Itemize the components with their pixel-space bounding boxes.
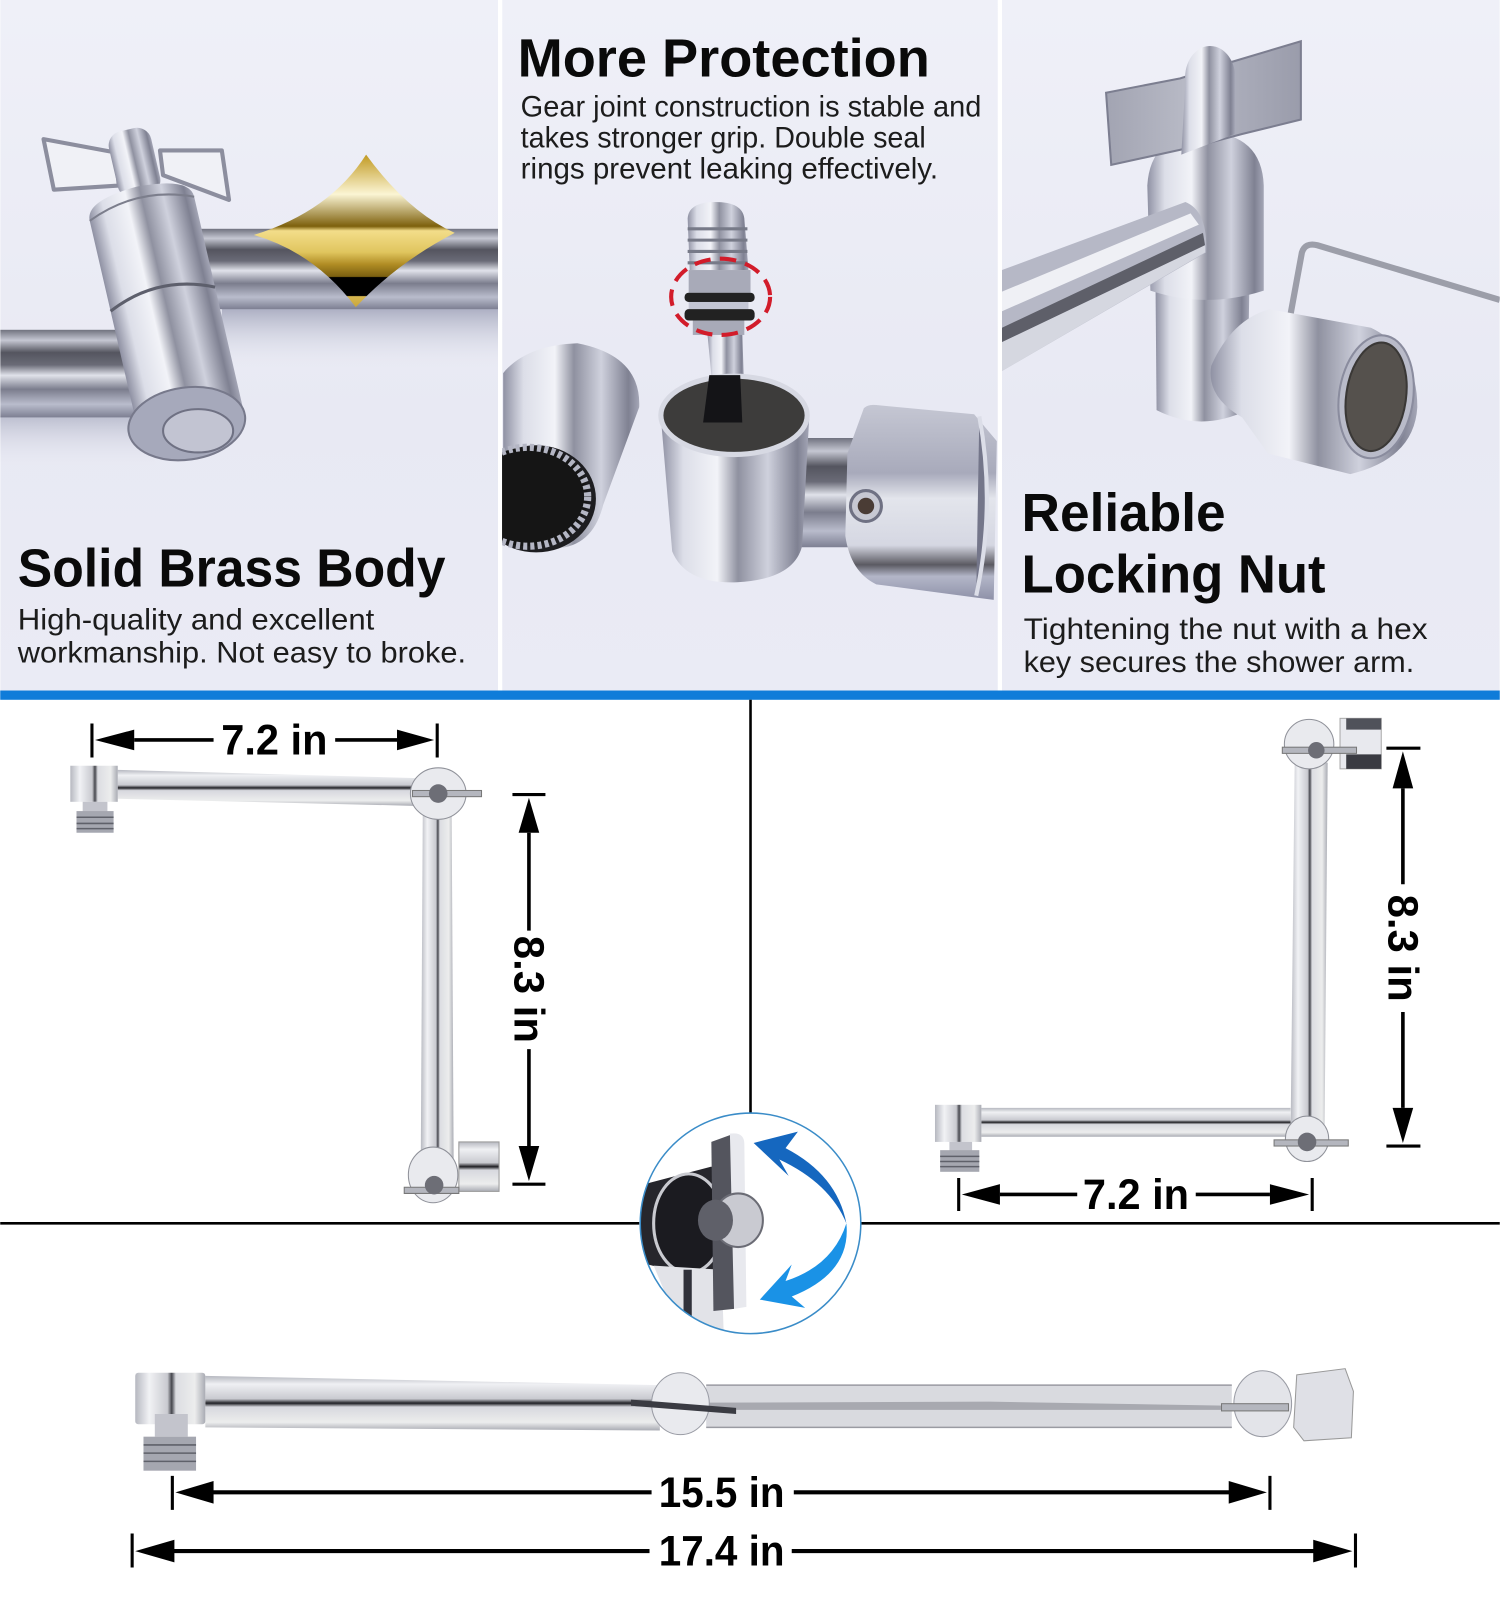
panel: more protection: [468, 0, 998, 691]
dimension: 8.3 in right vertical: [1379, 748, 1426, 1146]
threaded stem: [684, 202, 755, 375]
diagonal arm: [1002, 202, 1206, 371]
arm drawing: full extended: [135, 1369, 1353, 1471]
dimension: 7.2 in top right: [959, 1171, 1312, 1218]
horizontal tube: [196, 229, 498, 309]
rotation arrows: [754, 1132, 846, 1223]
panel: reliable locking nut: key secures the shower arm.: [1024, 646, 1414, 679]
wing handle right: [160, 150, 229, 200]
dimension: 17.4 in: 17.4 in: [659, 1528, 785, 1575]
panel: more protection: rings prevent leaking effectively.: [521, 152, 938, 185]
nut: [1211, 309, 1421, 474]
heading: More Protection: [518, 28, 930, 88]
dimension: 7.2 in top left: 7.2 in: [221, 716, 327, 763]
dimension: 17.4 in: [132, 1528, 1355, 1575]
handle close-up: [640, 1133, 763, 1335]
blue divider bar: [0, 691, 1500, 700]
description: High-quality and excellent: [18, 604, 375, 637]
left sleeve: [502, 343, 640, 552]
upper body: [1147, 132, 1264, 300]
heading: Solid Brass Body: [18, 538, 446, 598]
left arm tube: [0, 330, 134, 418]
arm drawing: top left: [70, 766, 499, 1203]
connector: [802, 438, 853, 548]
shadow under tube: [222, 309, 498, 348]
dimension: 7.2 in top left: [92, 716, 437, 763]
dimension: 8.3 in left vertical: [506, 795, 553, 1184]
gold corner emblem: [254, 155, 455, 307]
lower body: [1156, 289, 1249, 422]
panel: solid brass body: workmanship. Not easy to broke.: [17, 637, 466, 670]
dimension: 8.3 in left vertical: 8.3 in: [506, 936, 553, 1043]
dimension: 8.3 in right vertical: 8.3 in: [1379, 895, 1426, 1002]
description: Tightening the nut with a hex: [1024, 613, 1428, 646]
handle knob: [1181, 46, 1235, 155]
panel: more protection: takes stronger grip. Double seal: [521, 121, 926, 154]
red dashed seal marker: [671, 259, 770, 335]
hex key: [1291, 245, 1500, 314]
panel: solid brass body: [0, 0, 498, 691]
wing handle left: [44, 139, 119, 190]
hex screw: [850, 491, 881, 521]
quadrant divider lines: [0, 700, 1500, 1223]
panel: reliable locking nut: Locking Nut: [1022, 545, 1326, 605]
dimension: 7.2 in top right: 7.2 in: [1083, 1171, 1189, 1218]
shadow under arm: [0, 416, 134, 446]
wing handle: [1106, 41, 1301, 165]
arm drawing: top right: [935, 718, 1381, 1172]
end cap inner disc: [163, 409, 233, 452]
dimension: 15.5 in: [172, 1469, 1270, 1516]
cup: [661, 375, 809, 582]
rotation detail circle: [640, 1113, 861, 1335]
joint body: [89, 128, 242, 411]
panel: reliable locking nut: [1002, 0, 1500, 691]
dimension: 15.5 in: 15.5 in: [659, 1469, 785, 1516]
description: Gear joint construction is stable and: [521, 90, 981, 123]
hex nut: [845, 405, 997, 600]
end cap: [127, 386, 246, 462]
heading: Reliable: [1022, 483, 1226, 543]
